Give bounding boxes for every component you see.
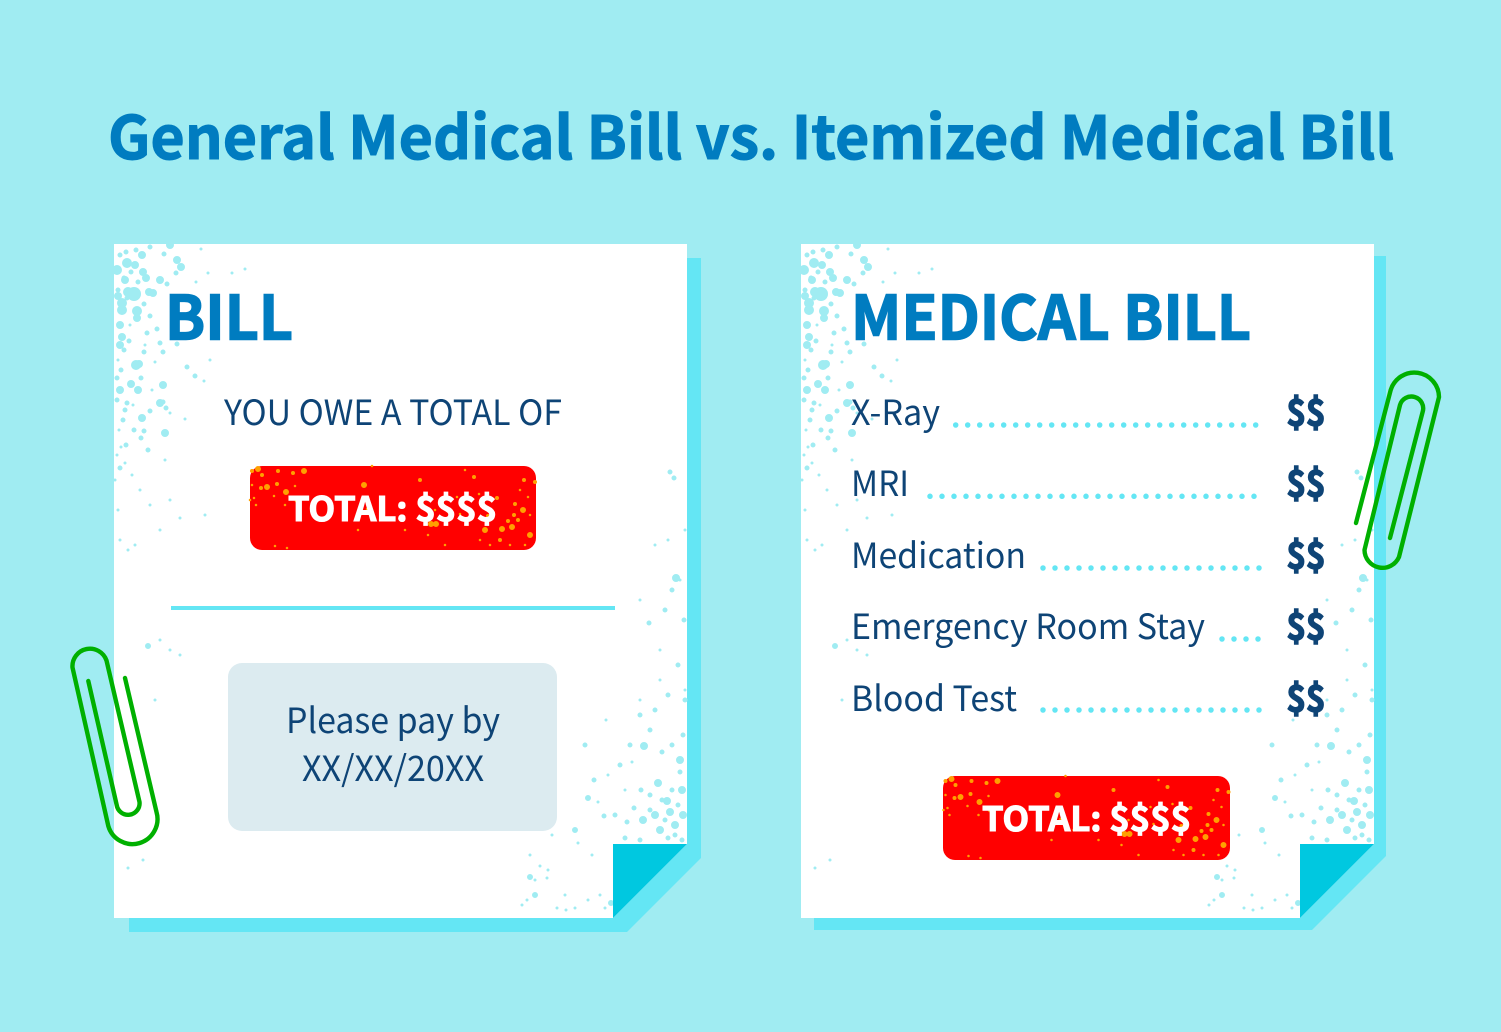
total badge: TOTAL: $$$$ (288, 482, 497, 531)
paper shadow (129, 258, 701, 932)
row: Medication: $$ (1286, 528, 1326, 580)
total badge (943, 776, 1230, 860)
medical bill heading: MEDICAL BILL (851, 270, 1251, 358)
row: Emergency Room Stay: Emergency Room Stay (851, 599, 1205, 650)
row: X-Ray (851, 384, 1326, 436)
paper sheet (801, 244, 1374, 918)
total badge: TOTAL: $$$$ (982, 792, 1191, 841)
row: Blood Test: Blood Test (851, 671, 1017, 722)
divider line (171, 606, 615, 610)
panel: itemized medical bill (801, 244, 1386, 930)
paper speckle texture (115, 245, 685, 910)
panel: general bill (114, 244, 701, 932)
paper shadow (814, 256, 1386, 930)
row: Blood Test: $$ (1286, 670, 1326, 722)
icon: paperclip right (1356, 373, 1439, 568)
row: X-Ray: $$ (1286, 384, 1326, 436)
row: Blood Test (851, 670, 1326, 722)
row: Emergency Room Stay: $$ (1286, 598, 1326, 650)
folded corner (1300, 844, 1374, 918)
amount owed label: YOU OWE A TOTAL OF (223, 385, 562, 436)
payment due box: Please pay by (286, 693, 500, 744)
row: X-Ray: X-Ray (851, 385, 940, 436)
title: General Medical Bill vs. Itemized Medical Bill (108, 91, 1394, 177)
row: MRI (851, 456, 1326, 508)
bill heading: BILL (165, 270, 293, 358)
row: MRI: MRI (851, 456, 909, 507)
row: Medication (851, 528, 1326, 580)
total badge (250, 466, 536, 550)
payment due box: XX/XX/20XX (302, 741, 484, 792)
payment due box (228, 663, 557, 831)
row: Medication: Medication (851, 528, 1026, 579)
folded corner (613, 844, 687, 918)
paper sheet (114, 244, 687, 918)
row: MRI: $$ (1286, 456, 1326, 508)
paper speckle texture (802, 245, 1372, 910)
icon: paperclip left (72, 649, 157, 844)
